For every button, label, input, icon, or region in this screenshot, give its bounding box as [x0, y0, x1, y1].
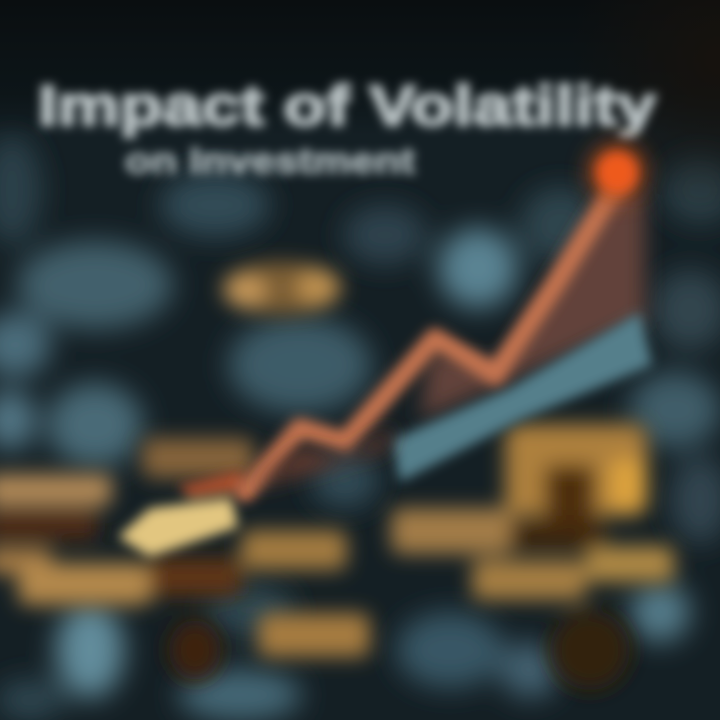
gold bars left cluster	[0, 438, 370, 680]
gold stack right	[391, 424, 674, 690]
warm corner fade	[560, 0, 720, 220]
title	[38, 74, 656, 181]
small gold label	[222, 262, 342, 314]
chart: blue band	[392, 312, 652, 482]
icon: glowing orange point	[585, 140, 649, 204]
chart: rising orange line	[245, 180, 620, 492]
bright gold bar	[118, 470, 250, 557]
title: Impact of Volatility	[38, 74, 656, 138]
subtitle: on Investment	[125, 140, 415, 181]
chart: shaded area under line	[420, 185, 645, 420]
chart: red area beneath line start	[250, 425, 395, 490]
dark top fade	[0, 0, 720, 135]
